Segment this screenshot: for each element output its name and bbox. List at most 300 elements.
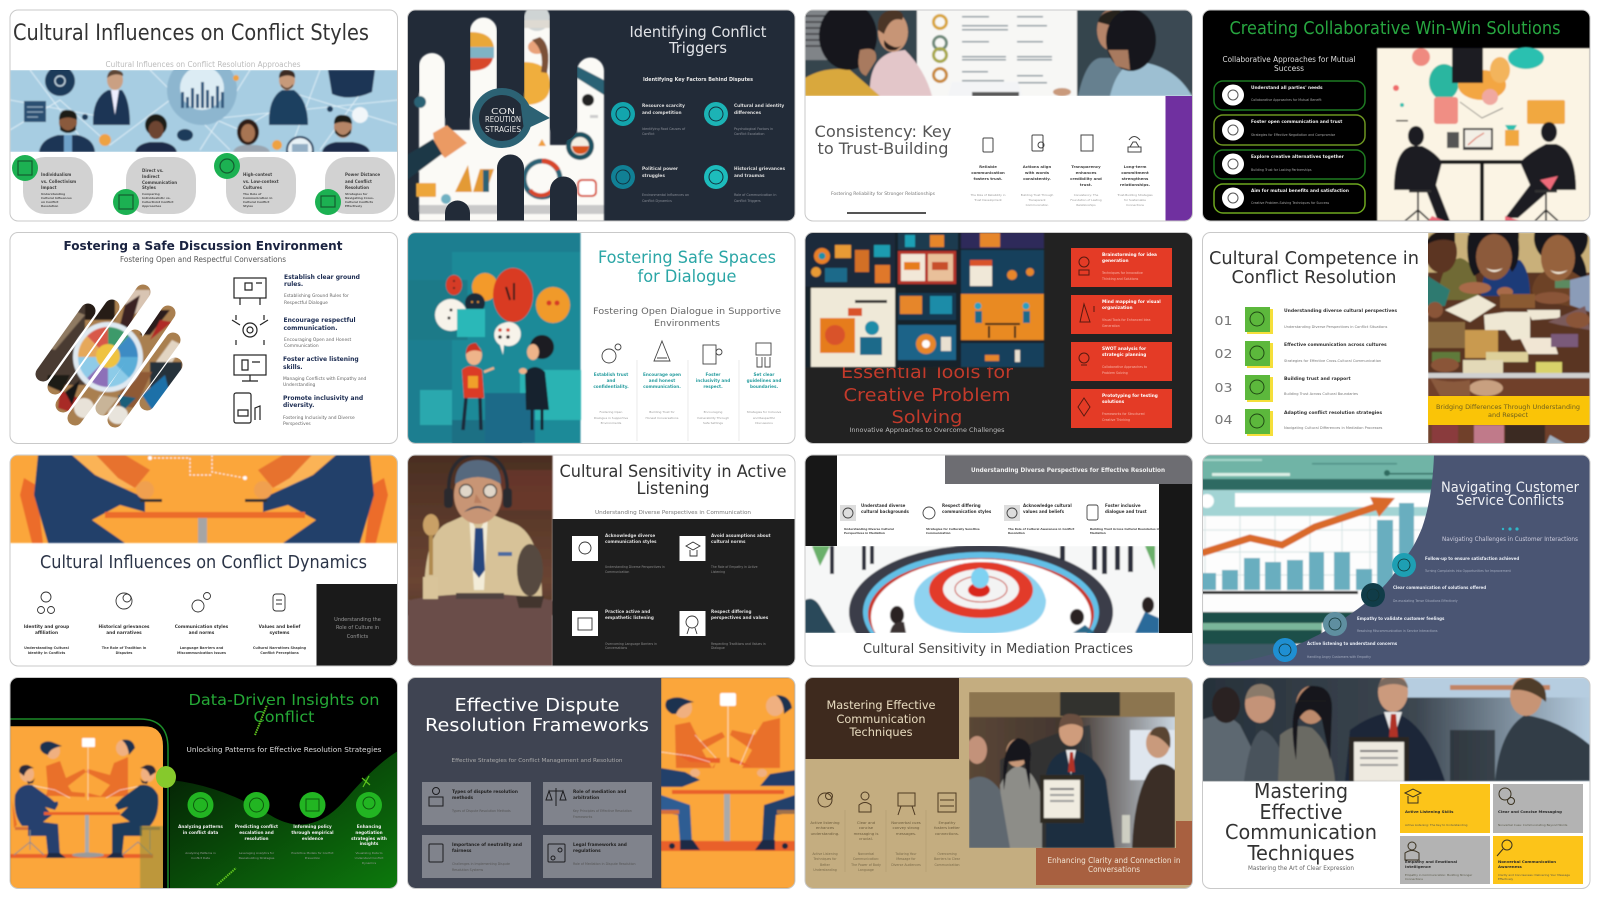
item: Direct vs. Indirect: Communication <box>142 180 177 185</box>
item: Power Distance: Resolution <box>345 185 369 190</box>
four trust columns: for Sustainable <box>1124 198 1146 202</box>
title: Listening <box>636 479 710 498</box>
subheading: Success <box>1274 64 1304 73</box>
four technique columns: The Power of Body <box>850 863 881 867</box>
insight columns: Enhancing <box>357 824 381 829</box>
list text <box>283 274 366 427</box>
title: for Dialogue <box>638 267 736 286</box>
red tool cards: Problem Solving <box>1102 371 1128 375</box>
dark panel with items: The Role of Empathy in Active <box>710 565 758 569</box>
list text: Encouraging Open and Honest <box>284 337 351 343</box>
four columns: Cultural Narratives Shaping <box>253 646 307 650</box>
heading <box>630 26 766 56</box>
title: Solving <box>892 408 962 428</box>
title: Data-Driven Insights on <box>188 691 380 709</box>
pill text: Aim for mutual benefits and satisfaction <box>1251 188 1349 194</box>
four technique columns: enhances <box>816 825 834 830</box>
four columns <box>24 592 307 655</box>
title <box>560 462 786 498</box>
list text: Communication <box>284 343 319 349</box>
dark panel with items: cultural norms <box>711 539 746 544</box>
four perspectives: The Role of Cultural Awareness in Conflict <box>1008 527 1075 531</box>
circle steps: Active listening to understand concerns <box>1307 641 1398 646</box>
red tool cards: Visual Tools for Enhanced Idea <box>1102 318 1150 322</box>
title <box>841 363 1014 428</box>
panel: Identifying Conflict Triggers <box>407 5 795 221</box>
pill icons <box>1222 84 1244 208</box>
item: Power Distance: Navigating Cross- <box>345 196 375 200</box>
numbered list: Building Trust Across Cultural Boundaries <box>1284 392 1358 396</box>
four practice columns <box>593 341 781 441</box>
title: Effective <box>1260 800 1342 824</box>
dark panel with items: Listening <box>711 570 725 574</box>
circle steps <box>1273 553 1519 662</box>
four columns: Miscommunication Issues <box>177 651 226 655</box>
item: Individualism vs. Collectivism: Cultural Influences <box>41 196 72 200</box>
insight columns: Predicting conflict <box>235 824 278 829</box>
four technique columns: Understanding <box>813 868 837 872</box>
framework boxes: Importance of neutrality and <box>452 842 522 848</box>
trigger items: Conflict Dynamics <box>642 199 672 203</box>
trigger items: Resource scarcity <box>642 103 685 109</box>
four technique columns: Communication <box>934 863 960 867</box>
accent bar <box>1166 96 1192 221</box>
trigger items: Historical grievances <box>734 166 785 172</box>
numbered list: Effective communication across cultures <box>1284 342 1387 348</box>
title <box>1225 779 1377 865</box>
banner <box>1428 396 1590 425</box>
insight columns: negotiation <box>355 830 383 835</box>
dark panel with items: Communication <box>605 570 629 574</box>
list text: Foster active listening <box>283 356 359 363</box>
four practice columns: Encouraging <box>704 410 722 414</box>
four columns: Understanding Cultural <box>24 646 69 650</box>
photo: meeting at whiteboard <box>805 2 1193 96</box>
four trust columns: commitment <box>1121 170 1149 175</box>
trigger items: and traumas <box>734 173 765 179</box>
trigger items: struggles <box>642 173 665 179</box>
item: Power Distance: and Conflict <box>345 179 372 184</box>
circle steps: Follow-up to ensure satisfaction achieved <box>1425 556 1519 561</box>
circle steps: Turning Complaints into Opportunities for Improvement <box>1424 569 1512 573</box>
panel: Effective Dispute Resolution Frameworks <box>408 678 795 888</box>
circle steps: De-escalating Tense Situations Effectively <box>1393 599 1458 603</box>
skill grid: Clarity and Conciseness: Delivering Your Message <box>1498 873 1570 877</box>
four trust columns: fosters trust. <box>974 176 1003 181</box>
squiggle accents <box>217 705 370 885</box>
four trust columns: Long-term <box>1124 164 1146 169</box>
four trust columns: Transparent <box>1027 198 1046 202</box>
seated arms <box>661 768 700 787</box>
trigger items: Conflict <box>642 132 655 136</box>
list text: diversity. <box>283 402 314 409</box>
dark panel with items: Overcoming Language Barriers in <box>605 642 657 646</box>
dark panel with items: Avoid assumptions about <box>711 533 771 538</box>
pill text: Foster open communication and trust <box>1251 119 1342 125</box>
dark panel with items: Dialogue <box>711 646 725 650</box>
framework boxes: arbitration <box>573 795 599 801</box>
subtitle: Environments <box>654 319 720 329</box>
skill grid: Empathy in Communication: Building Stronger <box>1405 873 1473 877</box>
subtitle <box>594 307 780 326</box>
four practice columns: Environments <box>601 421 622 425</box>
four technique columns: Active Listening <box>812 852 838 856</box>
dark panel with items: Understanding Diverse Perspectives in <box>605 565 665 569</box>
four trust columns: Trust Development <box>973 198 1003 202</box>
dark panel with items: Respect differing <box>711 609 751 614</box>
photo: award presentation <box>967 692 1175 848</box>
four trust columns: The Role of Reliability in <box>970 193 1006 197</box>
four technique columns: Active listening <box>810 820 840 825</box>
subtitle: Identifying Key Factors Behind Disputes <box>643 77 754 83</box>
four technique columns <box>810 792 961 872</box>
four technique columns: convey strong <box>893 825 920 830</box>
standing woman <box>675 722 725 768</box>
trigger items: Environmental Influences on <box>642 193 689 197</box>
four technique columns: Language <box>858 868 874 872</box>
item: Power Distance: Strategies for <box>345 192 368 196</box>
subtitle: Unlocking Patterns for Effective Resolution Strategies <box>186 746 382 754</box>
four practice columns: Strategies for Inclusive <box>747 410 781 414</box>
red tool cards: Collaborative Approaches to <box>1102 365 1147 369</box>
item: Individualism vs. Collectivism: on Conflict <box>41 200 59 204</box>
insight columns: strategies with <box>351 836 387 841</box>
framework boxes <box>422 782 652 878</box>
four practice columns: inclusivity and <box>696 378 730 383</box>
item: High-context vs. Low-context: vs. Low-context <box>243 179 279 184</box>
heading: Triggers <box>668 39 727 57</box>
illustration: conflict resolution strategies collage: CON <box>491 107 515 116</box>
numbered list: 02 <box>1214 346 1232 361</box>
four trust columns: Building Trust Through <box>1021 193 1053 197</box>
illustration: four people at orange table <box>10 719 176 889</box>
subtitle: Fostering Open and Respectful Conversations <box>120 255 286 264</box>
heading: to Trust-Building <box>818 139 948 158</box>
pill text: Collaborative Approaches for Mutual Benefit <box>1251 98 1322 102</box>
circle steps: Resolving Miscommunication in Service Interactions <box>1357 629 1438 633</box>
skill grid: Active Listening: The Key to Understanding <box>1405 823 1468 827</box>
title: Resolution Frameworks <box>425 716 649 736</box>
four practice columns: guidelines and <box>747 378 781 383</box>
four technique columns: Message for <box>896 857 916 861</box>
subtitle: Innovative Approaches to Overcome Challenges <box>850 427 1004 434</box>
trigger items: Psychological Factors in <box>734 127 773 131</box>
panel: Fostering a Safe Discussion Environment <box>36 240 366 428</box>
framework boxes: regulations <box>573 848 601 854</box>
item: High-context vs. Low-context: Styles <box>243 204 253 208</box>
dark callout panel: Conflicts <box>347 634 369 640</box>
title: Mastering <box>1254 779 1348 803</box>
standing woman <box>46 761 86 797</box>
four perspectives: values and beliefs <box>1023 509 1065 514</box>
four practice columns: and <box>607 378 615 383</box>
numbered list: 01 <box>1214 313 1232 328</box>
title: Techniques <box>1247 841 1354 865</box>
four trust columns: Trust-Building Strategies <box>1116 193 1153 197</box>
title: Cultural Sensitivity in Active <box>560 462 786 481</box>
panel: Cultural Influences on Conflict Styles <box>10 10 398 221</box>
pill text: Understand all parties' needs <box>1251 85 1323 91</box>
insight columns: Dynamics <box>362 861 377 865</box>
four technique columns: Techniques for <box>812 857 837 861</box>
insight columns: evidence <box>302 836 323 841</box>
four practice columns: Fostering Open <box>600 410 623 414</box>
four trust columns <box>970 135 1153 207</box>
red tool cards: organization <box>1102 305 1133 311</box>
approach pills <box>1214 81 1365 213</box>
four technique columns: Better <box>820 863 831 867</box>
list text: communication. <box>284 325 338 332</box>
framework boxes: Legal frameworks and <box>573 842 627 848</box>
illustration: conflict resolution strategies collage: REOUTION <box>485 115 521 124</box>
item: Individualism vs. Collectivism: Individualism <box>41 172 71 177</box>
subtitle: Mastering the Art of Clear Expression <box>1248 866 1354 872</box>
green wave background <box>170 751 398 889</box>
heading: Identifying Conflict <box>630 23 766 41</box>
title: Cultural Sensitivity in Mediation Practices <box>863 641 1133 657</box>
item: High-context vs. Low-context: High-context <box>243 172 272 177</box>
dark panel with items: Respecting Traditions and Values in <box>711 642 766 646</box>
illustration: negotiation at orange table <box>10 455 398 543</box>
illustration: diagonal photo strips with wheel <box>36 284 182 428</box>
trigger items: Political power <box>642 166 679 172</box>
skill grid: Nonverbal Cues: Communicating Beyond Words <box>1498 823 1568 827</box>
four practice columns: Set clear <box>754 372 775 377</box>
four practice columns: and honest <box>649 378 675 383</box>
four columns: The Role of Tradition in <box>102 646 147 650</box>
four practice columns: Safe Settings <box>703 421 723 425</box>
subheading <box>1222 56 1355 71</box>
four technique columns: Nonverbal <box>858 852 874 856</box>
insight columns: Predictive Models for Conflict <box>291 851 334 855</box>
subtitle: Understanding Diverse Perspectives in Communication <box>595 510 751 516</box>
four technique columns: Nonverbal cues <box>891 820 921 825</box>
dark panel with items: Acknowledge diverse <box>605 533 655 538</box>
numbered list: Strategies for Effective Cross-Cultural Communication <box>1284 359 1381 363</box>
four trust columns: Connections <box>1126 203 1144 207</box>
title <box>1209 249 1419 288</box>
framework boxes: Frameworks <box>573 815 593 819</box>
red tool cards: Frameworks for Structured <box>1102 412 1145 416</box>
four trust columns: Foundation of Lasting <box>1070 198 1102 202</box>
insight columns: Understand Conflict <box>355 856 384 860</box>
subheading: Collaborative Approaches for Mutual <box>1222 55 1356 64</box>
list text: Fostering Inclusivity and Diverse <box>283 415 355 421</box>
framework boxes: methods <box>452 795 474 801</box>
four trust columns: consistently. <box>1023 176 1051 181</box>
standing man <box>730 718 780 768</box>
pill text: Creative Problem-Solving Techniques for Success <box>1251 201 1330 205</box>
trigger items: Conflict Triggers <box>734 199 761 203</box>
four perspectives: dialogue and trust <box>1105 509 1147 514</box>
panel: Navigating Customer Service Conflicts <box>1200 455 1590 668</box>
dark callout panel: Understanding the <box>334 617 381 623</box>
four perspectives <box>840 503 1160 535</box>
illustration: conflict resolution strategies collage: STRAGIES <box>485 125 521 134</box>
title: Navigating Customer <box>1441 480 1579 496</box>
trigger items: and competition <box>642 110 682 116</box>
four perspectives: Understanding Diverse Cultural <box>844 527 894 531</box>
list text: Understanding <box>283 382 316 388</box>
trigger items <box>611 102 785 203</box>
four technique columns: concise <box>859 825 874 830</box>
four trust columns: strengthens <box>1122 176 1149 181</box>
list text: Respectful Dialogue <box>284 300 328 306</box>
capsule overlay <box>407 10 577 221</box>
four technique columns: Communication: <box>853 857 879 861</box>
red tool cards <box>1071 248 1172 428</box>
red tool cards: Thinking and Solutions <box>1101 277 1139 281</box>
item: High-context vs. Low-context <box>214 153 296 214</box>
four trust columns: Transparency <box>1071 164 1101 169</box>
item: Direct vs. Indirect: Comparing <box>142 192 160 196</box>
banner: and Respect <box>1488 411 1528 419</box>
title <box>188 691 380 726</box>
panel: Fostering Safe Spaces for Dialogue <box>408 232 795 444</box>
title block <box>805 678 959 759</box>
terracotta callout <box>1036 821 1193 885</box>
title: Cultural Influences on Conflict Styles <box>13 21 369 46</box>
subtitle: Effective Strategies for Conflict Management and Resolution <box>452 758 622 764</box>
four technique columns: crucial. <box>859 836 873 841</box>
insight columns: escalation and <box>239 830 274 835</box>
framework boxes: Role of mediation and <box>573 789 626 795</box>
dark panel with items: empathetic listening <box>605 615 654 620</box>
four practice columns: Encourage open <box>643 372 681 377</box>
item: High-context vs. Low-context: Cultures <box>243 185 263 190</box>
red tool cards: Mind mapping for visual <box>1102 299 1161 305</box>
item: Direct vs. Indirect: Indirect <box>142 174 160 179</box>
item: Direct vs. Indirect: Direct vs. <box>142 168 164 173</box>
subtitle: Cultural Influences on Conflict Resolution Approaches <box>106 60 301 69</box>
four perspectives: Strategies for Culturally Sensitive <box>926 527 980 531</box>
four perspectives: Foster inclusive <box>1105 503 1141 508</box>
four perspectives: Understand diverse <box>861 503 906 508</box>
four technique columns: Tailoring Your <box>894 852 917 856</box>
title: Creative Problem <box>844 386 1010 406</box>
red tool cards: solutions <box>1102 399 1125 405</box>
pill text: Building Trust for Lasting Partnerships <box>1251 168 1312 172</box>
title: Cultural Competence in <box>1209 249 1419 269</box>
four practice columns: Dialogue in Supportive <box>594 416 628 420</box>
four practice columns: Foster <box>706 372 721 377</box>
panel: Cultural Competence in Conflict Resolution <box>1202 211 1590 444</box>
four trust columns: Actions align <box>1023 164 1051 169</box>
list text: Managing Conflicts with Empathy and <box>283 376 366 382</box>
framework boxes: Challenges in Implementing Dispute <box>452 862 510 866</box>
four columns: systems <box>270 630 290 636</box>
subtitle: Navigating Challenges in Customer Interactions <box>1442 536 1578 543</box>
insight columns: Prevention <box>305 856 320 860</box>
dark panel with items <box>552 519 796 666</box>
red tool cards: generation <box>1102 258 1129 264</box>
framework boxes: Types of Dispute Resolution Methods <box>451 809 511 813</box>
banner <box>945 455 1193 484</box>
pill text: Strategies for Effective Negotiation and Compromise <box>1251 133 1335 137</box>
illustration: conflict resolution strategies collage <box>407 5 604 221</box>
red tool cards: Brainstorming for idea <box>1102 252 1157 258</box>
four perspectives: Resolution <box>1008 531 1025 535</box>
title: Communication <box>1225 820 1377 844</box>
framework boxes: Resolution Systems <box>452 868 484 872</box>
numbered list: Understanding diverse cultural perspectives <box>1284 308 1397 314</box>
item: Direct vs. Indirect: Individualistic vs. <box>142 196 171 200</box>
title: Effective Dispute <box>454 696 620 716</box>
four trust columns: Relationships <box>1076 203 1096 207</box>
four technique columns: Diverse Audiences <box>891 863 921 867</box>
item: Power Distance: Cultural Conflicts <box>345 200 373 204</box>
insight columns: Informing policy <box>293 824 332 829</box>
heading <box>815 125 951 158</box>
four technique columns: Empathy <box>939 820 956 825</box>
title <box>425 696 649 736</box>
title block: Techniques <box>849 725 912 739</box>
numbered list: 03 <box>1214 380 1232 395</box>
panel: Creating Collaborative Win-Win Solutions <box>1202 10 1590 221</box>
skill grid <box>1400 784 1583 884</box>
insight columns: Analyzing Patterns in <box>185 851 216 855</box>
red tool cards: Prototyping for testing <box>1102 393 1158 399</box>
icon list <box>232 278 268 423</box>
photo: award presentation wide <box>1202 672 1590 782</box>
panel: Consistency Key to Trust-Building <box>805 2 1193 221</box>
four columns: and narratives <box>106 630 142 636</box>
four perspectives: communication styles <box>942 509 992 514</box>
four columns: Disputes <box>116 651 132 655</box>
dark panel with items: Conversations <box>605 646 627 650</box>
insight columns: through empirical <box>291 830 334 835</box>
four columns: Identity in Conflicts <box>28 651 65 655</box>
four columns: and norms <box>189 630 215 636</box>
numbered list: Adapting conflict resolution strategies <box>1284 410 1382 416</box>
title: Cultural Influences on Conflict Dynamics <box>40 553 367 573</box>
title: Fostering Safe Spaces <box>598 248 776 267</box>
red tool cards: strategic planning <box>1102 352 1146 358</box>
panel: Cultural Sensitivity in Active Listening <box>395 454 796 666</box>
panel: Mastering Effective Communication Techniques (white) <box>1202 672 1590 888</box>
list text: Establish clear ground <box>284 274 360 281</box>
list text: skills. <box>283 364 303 371</box>
four technique columns: connections. <box>935 831 959 836</box>
red tool cards: Techniques for Innovative <box>1101 271 1143 275</box>
skill grid: Connections <box>1405 877 1423 881</box>
four technique columns: Overcoming <box>937 852 957 856</box>
four technique columns: messages. <box>896 831 916 836</box>
panel: Cultural Influences on Conflict Dynamics <box>10 455 398 666</box>
four trust columns: trust. <box>1080 182 1093 187</box>
trigger items: Conflict Escalation <box>734 132 764 136</box>
insight columns: Peacebuilding Strategies <box>239 856 275 860</box>
four trust columns: credibility and <box>1070 176 1102 181</box>
skill grid: Effectively <box>1498 877 1513 881</box>
panel: Cultural Sensitivity in Mediation Practices <box>805 455 1193 679</box>
four practice columns: and Respectful <box>753 416 775 420</box>
framework boxes: Key Principles of Effective Resolution <box>573 809 632 813</box>
skill grid: Empathy and Emotional <box>1405 859 1457 864</box>
four practice columns: Building Trust for <box>649 410 676 414</box>
skill grid: Nonverbal Communication <box>1498 859 1556 864</box>
four trust columns: communication <box>971 170 1005 175</box>
illustration: business people network <box>10 70 397 152</box>
pill text: Explore creative alternatives together <box>1251 154 1345 160</box>
list text: Promote inclusivity and <box>283 395 363 402</box>
framework boxes: fairness <box>452 848 472 854</box>
item: High-context vs. Low-context: The Role of <box>243 192 262 196</box>
underline bar <box>847 212 926 214</box>
banner: Bridging Differences Through Understanding <box>1436 403 1580 411</box>
item: Individualism vs. Collectivism <box>12 155 93 214</box>
decorative dots <box>1502 527 1519 531</box>
